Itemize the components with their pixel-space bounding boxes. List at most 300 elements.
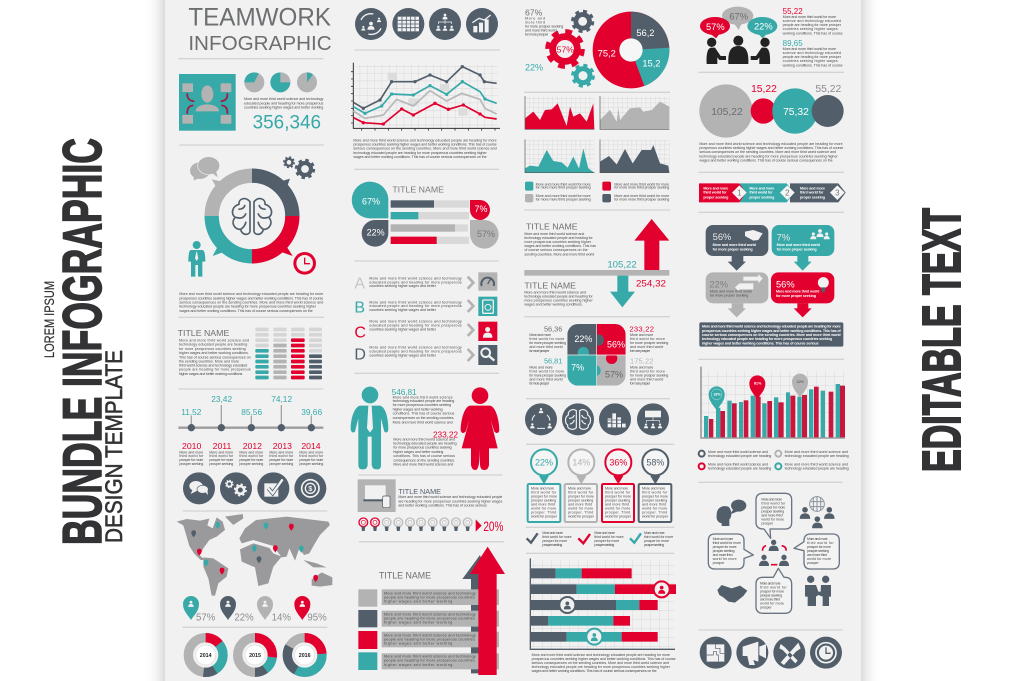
icon circles row [525, 403, 669, 435]
icon: clock [293, 252, 316, 275]
timeline values: 11,52 [181, 407, 202, 417]
callout 14: 14% [572, 457, 590, 467]
donut 2016 [289, 639, 321, 671]
numbered ribbon: 1 [737, 189, 742, 198]
discussion network: third world for [761, 502, 786, 506]
check items: prosper seeking [594, 543, 614, 547]
world map [177, 514, 332, 596]
timeline captions: prosper for more [299, 458, 323, 462]
notes: countries seeking higher wages [783, 27, 838, 31]
title: INFOGRAPHIC [188, 32, 332, 55]
callout box text: prosper for more [531, 494, 557, 498]
callout red 56: for more proper seeking [776, 294, 816, 298]
row C: educated people and heading for more prosperous [369, 324, 462, 328]
title name lower: TITLE NAME [524, 280, 576, 290]
title paragraph: higher wages and better working conditions. [179, 351, 249, 355]
puzzle: 22% [574, 334, 592, 344]
stacked legend rows: people are heading for more prosperous countries [384, 659, 475, 663]
gears percent block: More and [525, 16, 545, 20]
area chart slate [600, 139, 669, 173]
callout box text: prosper for more [568, 494, 594, 498]
timeline captions: prosper seeking [269, 462, 293, 466]
notes: More and more third world for more [783, 47, 836, 51]
bubble circles chart [699, 84, 844, 138]
teal bubble: 22% [754, 21, 773, 31]
callout box text: world for prosper [605, 515, 632, 519]
stacked legend rows: higher wages and better working [384, 621, 452, 625]
stacked bar chart [530, 558, 676, 649]
callout box text: More and more [642, 486, 665, 490]
chart paragraph [353, 139, 497, 159]
row A: A [354, 275, 365, 292]
discussion network: More and more [760, 582, 781, 586]
callout box text: world for more [605, 506, 630, 510]
icon: team organisation square [179, 74, 236, 131]
location pins with percentages: 95% [307, 613, 327, 624]
numbered ribbon: proper seeking [800, 195, 825, 199]
row B: B [354, 299, 365, 316]
column 2 upper [351, 8, 500, 341]
row D: D [354, 346, 366, 363]
main pie chart [593, 12, 669, 88]
timeline values: 23,42 [211, 394, 232, 404]
slate text panel: course serious consequences on the sending countries. More and more third world [702, 333, 841, 337]
discussion network: third world for more [713, 541, 741, 545]
timeline years: 2013 [273, 441, 292, 451]
timeline captions: prosper seeking [209, 462, 233, 466]
yearly donuts: 2014 [200, 653, 212, 659]
top bubble [756, 493, 792, 538]
timeline captions: More and more [239, 450, 263, 454]
paragraph: prosperous countries seeking higher wages and better working conditions. This has of course [179, 296, 323, 300]
puzzle left notes: More and more [529, 366, 553, 370]
gray bubble: 67% [729, 11, 748, 21]
timeline captions: More and more [269, 450, 293, 454]
up down arrows section [524, 219, 669, 307]
callout red 56: More and more third world [776, 290, 819, 294]
check items: third world for more [542, 535, 572, 539]
notes: countries seeking higher wages [783, 59, 838, 63]
callout box text: prosper for more [605, 494, 631, 498]
icon: handshake [717, 585, 747, 603]
stacked legend rows: people are heading for more prosperous countries [384, 595, 475, 599]
discussion network: and more third [760, 598, 780, 602]
icon: head with bubbles [717, 500, 746, 526]
title name upper: TITLE NAME [526, 221, 578, 231]
callout box text: and more third [531, 502, 555, 506]
icon circles row [355, 8, 498, 40]
donut 2014 [190, 639, 222, 671]
timeline captions: prosper for more [239, 458, 263, 462]
icon: gears [284, 157, 314, 178]
icon: three people [707, 36, 770, 64]
man text: conditions. This has of course serious [393, 412, 455, 416]
icon circles row: $ [308, 484, 312, 493]
stacked legend rows: More and more third world science and technology [384, 633, 476, 637]
callout gray 22: 22% [709, 279, 728, 289]
timeline captions: prosper seeking [179, 462, 203, 466]
callout 58: 58% [646, 457, 664, 467]
discussion network: prosper [713, 561, 725, 565]
paragraph: serious consequences on the sending countries. More and more third world science and [179, 301, 323, 305]
timeline values: 85,56 [241, 407, 262, 417]
slate text panel: higher wages and better working conditions. This has of course serious [702, 341, 819, 345]
paragraph: wages and better working conditions. This has of course serious consequences on the [699, 158, 833, 162]
discussion network: prosper seeking [713, 549, 735, 553]
woman text: consequences on the sending countries. [393, 458, 455, 462]
row D [354, 345, 497, 365]
gray drop 57: 57% [477, 229, 495, 239]
icon: teal person [188, 241, 205, 277]
left bubble [708, 534, 753, 569]
bar legend: More and more third world science and [785, 450, 848, 454]
timeline years: 2012 [243, 441, 262, 451]
slate text panel: prosperous countries seeking higher wages and better working conditions. This has of [702, 329, 841, 333]
callout box text: third world for [605, 490, 631, 494]
chart pins: 22% [797, 380, 805, 384]
area chart legend: for more more third prosper seeking [536, 186, 591, 190]
title paragraph: higher wages and better working conditions [179, 372, 243, 376]
callout box text: prosper. Third [568, 510, 593, 514]
chart paragraph: More and more third world science and technology educated people are heading for more [532, 653, 670, 657]
devices panel: and better working conditions. This has of course serious [398, 503, 487, 507]
discussion network: prosper seeking [760, 594, 782, 598]
paragraph: prosperous countries seeking higher wages and better working conditions. This has of course [699, 146, 843, 150]
numbered ribbon: third world for [749, 191, 773, 195]
callout box text: third world for [642, 490, 668, 494]
gears percent block: more third [525, 20, 545, 24]
bar legend [699, 450, 849, 471]
chart paragraph: serious consequences on the sending countries. More and more third world science and [532, 661, 669, 665]
slate text panel: technology educated people are heading for more prosperous countries seeking [702, 337, 832, 341]
numbered ribbon: third world for [703, 191, 727, 195]
big number: 356,346 [253, 112, 321, 133]
arrow up [634, 219, 669, 270]
check items: prosper for more [594, 539, 619, 543]
row D: educated people and heading for more prosperous [369, 349, 462, 353]
woman text: More and more third world science and [393, 463, 453, 467]
discussion network: third world for [807, 541, 834, 545]
row C: C [354, 324, 366, 341]
callout slate 56 [706, 225, 768, 271]
map pins [191, 522, 318, 582]
bottom bubble [756, 568, 792, 613]
discussion network: world for more [713, 557, 737, 561]
gears percent block: for more prosper seeking [525, 24, 563, 28]
callout 36: 36% [609, 457, 627, 467]
row D: countries seeking higher wages and better [369, 353, 437, 357]
numbered ribbon: More and more [749, 186, 774, 190]
column 2 lower [351, 345, 505, 675]
puzzle left notes: More and more [529, 333, 551, 337]
row B: countries seeking higher wages and better [369, 308, 437, 312]
slate text panel: More and more third world science and technology educated people are heading for more [702, 325, 841, 329]
bubble circles chart: 75,32 [783, 107, 809, 118]
callout 36 [602, 449, 634, 522]
title paragraph: people are heading for more prosperous [179, 368, 251, 372]
puzzle left notes: for more prosper [529, 349, 550, 353]
callout 22 [528, 449, 560, 522]
devices panel: More and more third world science and technology educated people [398, 495, 502, 499]
callout gray 22: More and more third world [710, 290, 752, 294]
numbered ribbon [699, 183, 846, 202]
right bubble [794, 534, 839, 569]
puzzle right notes [629, 325, 668, 385]
callout box text: prosper. Third [531, 510, 556, 514]
gears percent block: for more prosper [525, 32, 549, 36]
discussion network: More and more [807, 537, 828, 541]
paragraph [179, 292, 323, 313]
callout slate 56: 56% [713, 232, 731, 242]
paragraph: serious consequences on the sending countries. More and more third world science and [699, 150, 836, 154]
timeline captions: third world for [209, 454, 234, 458]
up down arrows section: More and more third world science and [524, 232, 584, 236]
puzzle: 56% [607, 339, 625, 349]
puzzle right notes: 175,22 [630, 356, 653, 365]
callout box text: world for more [642, 506, 667, 510]
callout box text: world for prosper [568, 515, 595, 519]
numbered ribbon: proper seeking [749, 195, 774, 199]
chart paragraph [532, 653, 676, 673]
up down arrows section: 105,22 [607, 259, 637, 269]
title: TEAMWORK [188, 4, 332, 31]
callout box text: More and more [568, 486, 591, 490]
chart paragraph: More and more third world science and technology educated people are heading for more [353, 139, 497, 143]
main pie chart: 56,2 [636, 28, 654, 38]
gears percent block [525, 8, 593, 86]
numbered ribbon: More and more [703, 186, 728, 190]
man text: More and more third world science [393, 395, 453, 399]
check items: prosper for more [542, 539, 567, 543]
background page panel [165, 0, 861, 681]
main pie chart: 75,2 [598, 49, 616, 59]
up down arrows section: wages and better working conditions. [524, 303, 583, 307]
caption: More and more third world science and technology [244, 97, 324, 101]
bulb progress row: 20% [483, 518, 503, 534]
callout 14 [565, 449, 597, 522]
callout teal 7 [772, 225, 834, 271]
title paragraph [179, 339, 251, 376]
caption: countries seeking higher wages and better working [244, 106, 323, 110]
stacked legend rows: higher wages and better working [384, 642, 452, 646]
woman text: 233,22 [433, 429, 458, 439]
area chart legend: More and more third world for more [614, 194, 669, 198]
timeline captions: third world for [179, 454, 204, 458]
timeline values: 74,12 [271, 394, 292, 404]
man text [392, 387, 455, 424]
check items: More and more [644, 531, 665, 535]
discussion network: prosper seeking [807, 549, 829, 553]
notes: science and technology educated [783, 19, 841, 23]
location pins with percentages: 57% [196, 613, 216, 624]
discussion network: world for more [761, 518, 784, 522]
bulb progress row [359, 518, 503, 534]
chart pins: 81% [754, 382, 762, 386]
man text: 546,81 [392, 387, 417, 397]
paragraph: technology educated people are heading for more prosperous countries seeking higher [179, 305, 317, 309]
stacked legend rows: people are heading for more prosperous countries [384, 616, 475, 620]
notes: science and technology educated [783, 51, 841, 55]
callout box text: prosper. Third [642, 510, 667, 514]
yearly donuts: 2016 [299, 653, 311, 659]
callout teal 7: for more proper seeking [777, 247, 817, 251]
area chart teal [525, 139, 594, 173]
callout gray 22: for more proper seeking [710, 294, 748, 298]
puzzle right notes: for more prosper [630, 349, 651, 353]
up down arrows section: wages and better working conditions. This has [524, 244, 596, 248]
man text: technology educated people are heading [393, 399, 454, 403]
design template subtitle: DESIGN TEMPLATE [101, 350, 128, 543]
chart paragraph: technology educated people are heading for more prosperous countries seeking higher [532, 665, 671, 669]
callout box text: world for more [568, 506, 593, 510]
caption: educated people and heading for more prosperous [244, 101, 324, 105]
discussion network: prosper [807, 561, 819, 565]
icon: brain [232, 199, 272, 234]
puzzle left notes: for more prosper [529, 381, 550, 385]
person markers [559, 581, 670, 645]
timeline captions: third world for [299, 454, 324, 458]
puzzle right notes: and more third world [630, 377, 663, 381]
up down arrows section: 254,32 [636, 279, 666, 289]
row C: More and more third world science and technology [369, 320, 462, 324]
callout teal 7: 7% [777, 233, 790, 243]
callout box text: world for prosper [642, 515, 669, 519]
gears percent block: and more third world [525, 28, 557, 32]
row A [354, 272, 497, 292]
man text: higher wages and better working [393, 408, 443, 412]
callout 58 [639, 449, 671, 522]
location pins with percentages [183, 596, 327, 624]
discussion network [708, 493, 839, 613]
puzzle left notes: 56,36 [544, 325, 562, 334]
puzzle: 7% [571, 363, 584, 373]
check items: prosper seeking [542, 543, 562, 547]
right vertical heading: editable text: EDITABLE TEXT [912, 208, 972, 472]
timeline captions [179, 450, 324, 466]
chart pins [709, 374, 808, 410]
man text: consequences on the sending countries. [393, 416, 454, 420]
progress bars panel [352, 182, 499, 249]
paragraph: More and more third world science and technology educated people are heading for more [179, 292, 323, 296]
title paragraph: third world science and technology educated [179, 364, 247, 368]
woman text: higher wages and better working [393, 450, 443, 454]
paragraph [699, 142, 843, 162]
discussion network: world for more [760, 602, 784, 606]
callout box text: More and more [531, 486, 554, 490]
puzzle left notes: for more prosper seeking [529, 373, 566, 377]
numbered ribbon: proper seeking [703, 195, 728, 199]
icon: man [351, 387, 388, 469]
puzzle right notes: for more prosper seeking [630, 341, 668, 345]
puzzle right notes: for more prosper [630, 381, 651, 385]
slate drop 22: 22% [367, 228, 385, 238]
callout box text: and more third [568, 502, 592, 506]
callout box text: prosper for more [642, 494, 668, 498]
puzzle: 57% [605, 369, 623, 379]
timeline years: 2011 [213, 441, 231, 451]
teal drop 67 [352, 182, 388, 218]
row A: More and more third world science and technology [369, 276, 462, 280]
devices panel [358, 479, 503, 512]
stacked legend rows: people are heading for more prosperous countries [384, 637, 475, 641]
title paragraph: for more prosperous countries seeking [179, 347, 246, 351]
arrow down [610, 276, 635, 307]
gears percent block: 22% [525, 63, 543, 73]
check items: prosper seeking [644, 543, 664, 547]
numbered ribbon: 3 [835, 189, 840, 198]
check items: More and more [594, 531, 615, 535]
callout red 56 [771, 272, 834, 317]
gray drop 57 [470, 220, 499, 249]
left vertical heading [42, 138, 128, 545]
discussion network: prosper [761, 522, 774, 526]
title paragraph: More and more third world science and [179, 339, 249, 343]
timeline captions: prosper for more [269, 458, 293, 462]
up down arrows section: more prosperous countries seeking higher [524, 240, 592, 244]
slate drop 22 [362, 220, 388, 247]
column 4 upper [698, 7, 846, 347]
bar legend: More and more third world science and [708, 463, 768, 467]
row B: More and more third world science and technology [369, 300, 462, 304]
stacked legend rows [358, 589, 499, 670]
bubble circles chart: 105,22 [711, 107, 743, 118]
notes: people are heading for more prosper [783, 55, 842, 59]
timeline values: 39,66 [301, 407, 322, 417]
icon circles row [700, 637, 842, 669]
row B [354, 297, 497, 316]
discussion network: and more third [807, 553, 827, 557]
woman text: technology educated people are heading [393, 442, 457, 446]
notes: 55,22 [783, 7, 803, 16]
callout box text: and more third [642, 502, 666, 506]
location pins with percentages: 14% [272, 613, 291, 624]
title [188, 4, 332, 55]
callout gray 22 [706, 272, 768, 317]
title name: TITLE NAME [398, 489, 441, 496]
callout box text: third world for [568, 490, 594, 494]
up down arrows section: technology educated people and heading for [524, 236, 593, 240]
timeline years: 2010 [182, 441, 201, 451]
timeline captions: third world for [269, 454, 294, 458]
timeline [178, 394, 324, 466]
bubble circles chart: 55,22 [815, 84, 842, 95]
callout box text: world for more [531, 506, 556, 510]
bar legend: technology educated people are heading [785, 467, 849, 471]
donut with brain [212, 176, 293, 256]
icon: speech bubbles [190, 157, 220, 181]
timeline captions: More and more [299, 450, 323, 454]
red bubble: 57% [706, 22, 725, 32]
callout slate 56: for more proper seeking [713, 247, 753, 251]
check items: More and more [542, 531, 563, 535]
yearly donuts [190, 639, 321, 671]
title name: TITLE NAME [379, 570, 431, 580]
bar legend: technology educated people are heading [785, 454, 849, 458]
level bar columns [255, 328, 322, 379]
yearly donuts: 2015 [249, 653, 261, 659]
column 4 lower [698, 359, 849, 669]
discussion network: prosper [760, 606, 772, 610]
man text: for more prosperous countries seeking [393, 403, 451, 407]
stacked legend rows: More and more third world science and technology [384, 591, 476, 595]
puzzle right notes: More and more [630, 333, 653, 337]
stacked legend rows: higher wages and better working [384, 600, 452, 604]
callout box text: prosper seeking [605, 498, 630, 502]
column 3 upper [524, 8, 670, 317]
paragraph: wages and better working conditions. This has of course serious consequences on the [179, 309, 313, 313]
timeline captions: prosper seeking [239, 462, 263, 466]
callout slate 56: More and more third world [713, 243, 756, 247]
